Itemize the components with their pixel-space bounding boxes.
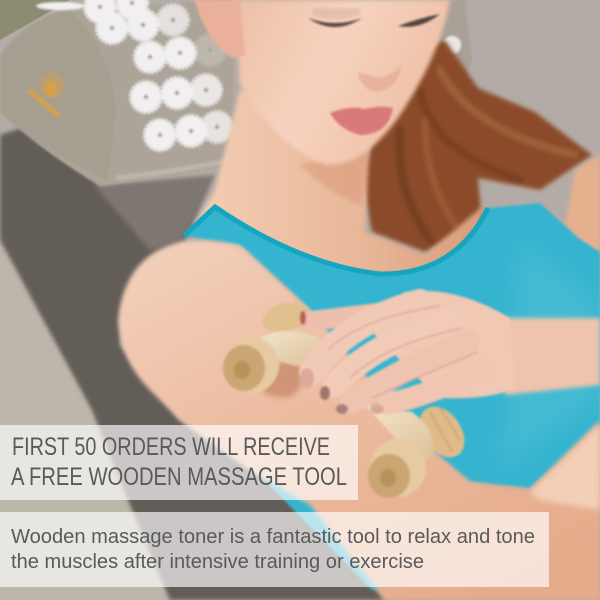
ear: [195, 0, 245, 58]
pillow: dark grey cushion: [0, 125, 385, 600]
panel: headline caption: [0, 425, 358, 500]
sofa fold behind hair: [440, 0, 472, 85]
nose shadow: [358, 64, 402, 92]
panel: description caption: [0, 512, 549, 587]
fingernails: [300, 311, 384, 414]
lower right chest skin: [530, 425, 600, 510]
icon: gold logo: [27, 72, 65, 118]
hand: [300, 291, 515, 414]
facial features: [308, 8, 440, 135]
heading: FIRST 50 ORDERS WILL RECEIVE: [12, 433, 330, 461]
description text: [11, 526, 535, 573]
tool: wooden massage roller: [223, 297, 474, 498]
lips: [330, 107, 393, 135]
handle bars: [257, 331, 325, 367]
eyes: [308, 18, 362, 27]
heading: A FREE WOODEN MASSAGE TOOL: [11, 463, 347, 491]
bolster: acupressure pillow: [0, 0, 235, 186]
chest and neck skin: [195, 90, 484, 282]
arm shadow: [262, 345, 315, 398]
front wheels: [223, 337, 426, 498]
back wheels: [259, 297, 474, 466]
hair: [362, 40, 592, 252]
face: [235, 0, 450, 165]
finger creases: [328, 306, 478, 398]
heading: [11, 433, 347, 491]
description text: the muscles after intensive training or exercise: [11, 551, 424, 573]
icons: white acupressure spikes: [36, 0, 232, 150]
top: teal tank: [184, 203, 600, 488]
top hem under the arm: [235, 450, 400, 590]
forearm: [505, 318, 600, 395]
arm: upper arm and elbow: [118, 241, 600, 600]
description text: Wooden massage toner is a fantastic tool to relax and tone: [11, 526, 535, 548]
right shoulder skin: [565, 155, 600, 260]
